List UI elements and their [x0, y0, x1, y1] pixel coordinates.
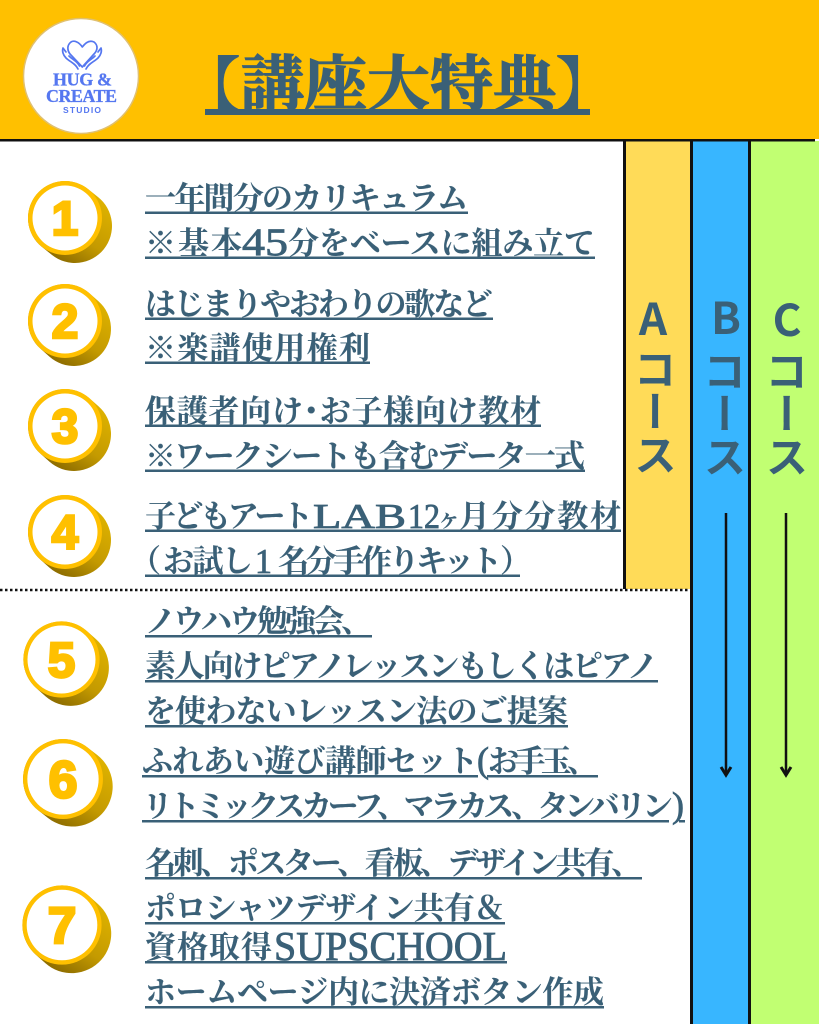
- badge 7: [22, 885, 102, 965]
- text 4: 子どもアート: [145, 499, 313, 534]
- text 6: (: [477, 740, 489, 780]
- title: 】: [556, 53, 614, 118]
- text 1: [145, 181, 595, 264]
- label: B course: B: [711, 283, 741, 347]
- text 5: を使わないレッスン法のご提案: [145, 694, 568, 729]
- header band: [0, 0, 819, 142]
- badge 6: 6: [49, 750, 77, 808]
- text 4: （: [130, 544, 161, 579]
- text 3: ※ワークシートも含むデータ一式: [145, 439, 585, 474]
- text 7: [145, 846, 642, 1010]
- text 3: [145, 394, 585, 474]
- text 4: お試し: [163, 544, 253, 579]
- text 1: 一年間分のカリキュラム: [145, 181, 468, 216]
- item 5: [23, 604, 658, 729]
- badge 3: [28, 389, 102, 463]
- text 4: 12: [408, 497, 440, 536]
- label: A course: A: [638, 284, 668, 348]
- item 3: [28, 389, 585, 474]
- item 4: [28, 495, 621, 581]
- text 6: お手玉、: [488, 744, 598, 779]
- label: A course: コース: [624, 347, 686, 476]
- arrow: C course: [781, 513, 791, 775]
- text 5: 素人向けピアノレッスンもしくはピアノ: [145, 649, 658, 684]
- badge 5: [23, 621, 100, 698]
- badge 6: [23, 739, 103, 819]
- label: C course: [756, 285, 818, 478]
- text 4: 名分手作りキット: [278, 544, 502, 579]
- text 3: 保護者向け･お子様向け教材: [145, 394, 541, 429]
- text 7: ポロシャツデザイン共有＆: [145, 891, 505, 926]
- text 5: [145, 604, 658, 729]
- text 5: ノウハウ勉強会、: [145, 604, 372, 639]
- badge 2: [28, 284, 102, 358]
- label: B course: [694, 283, 756, 478]
- text 4: LAB: [313, 497, 406, 536]
- text 6: リトミックスカーフ、マラカス、タンバリン: [142, 789, 673, 824]
- item 2: [28, 284, 493, 366]
- logo wordmark: [46, 70, 117, 115]
- badge 3: 3: [52, 401, 78, 454]
- badge 2: 2: [52, 296, 78, 349]
- text 4: [130, 497, 621, 581]
- text 4: 1: [255, 542, 272, 581]
- text 1: ※基本: [145, 226, 242, 261]
- text 6: ): [672, 785, 684, 825]
- text 1: 45: [242, 221, 288, 264]
- arrow: B course: [721, 513, 731, 775]
- label: C course: C: [773, 285, 801, 349]
- logo wordmark: STUDIO: [63, 105, 101, 115]
- title: [182, 52, 614, 118]
- dotted divider: [0, 589, 690, 591]
- badge 7: 7: [48, 897, 76, 954]
- text 7: 名刺、ポスター、看板、デザイン共有、: [145, 846, 642, 881]
- title: 講座大特典: [241, 52, 564, 118]
- badge 4: [28, 495, 102, 569]
- text 2: はじまりやおわりの歌など: [145, 287, 493, 322]
- panel: course A column: [623, 141, 691, 589]
- text 7: ホームページ内に決済ボタン作成: [145, 975, 604, 1010]
- label: C course: コース: [756, 349, 818, 478]
- item 7: [22, 846, 642, 1010]
- badge 1: [28, 181, 102, 255]
- text 7: 資格取得: [145, 930, 272, 965]
- logo: [24, 18, 138, 134]
- badge 1: 1: [52, 193, 78, 246]
- text 7: SUPSCHOOL: [274, 923, 507, 969]
- text 4: ）: [500, 544, 531, 579]
- icon: heart in hands: [63, 41, 101, 69]
- label: A course: [624, 284, 686, 476]
- text 6: ふれあい遊び講師セット: [142, 744, 478, 779]
- badge 4: 4: [52, 507, 79, 560]
- logo wordmark: CREATE: [46, 86, 117, 106]
- text 2: [145, 287, 493, 366]
- item 1: [28, 181, 595, 264]
- panel: course C column: [748, 141, 819, 1024]
- panel: course B column: [690, 141, 751, 1024]
- text 2: ※楽譜使用権利: [145, 331, 370, 366]
- text 4: ヶ: [437, 507, 461, 533]
- badge 5: 5: [48, 633, 75, 688]
- text 1: 分をベースに組み立て: [288, 226, 595, 261]
- text 4: 月分分教材: [459, 499, 621, 534]
- text 6: [142, 740, 685, 825]
- title: 【: [182, 53, 240, 118]
- logo wordmark: HUG &: [53, 70, 112, 90]
- label: B course: コース: [694, 349, 756, 478]
- item 6: [23, 739, 685, 825]
